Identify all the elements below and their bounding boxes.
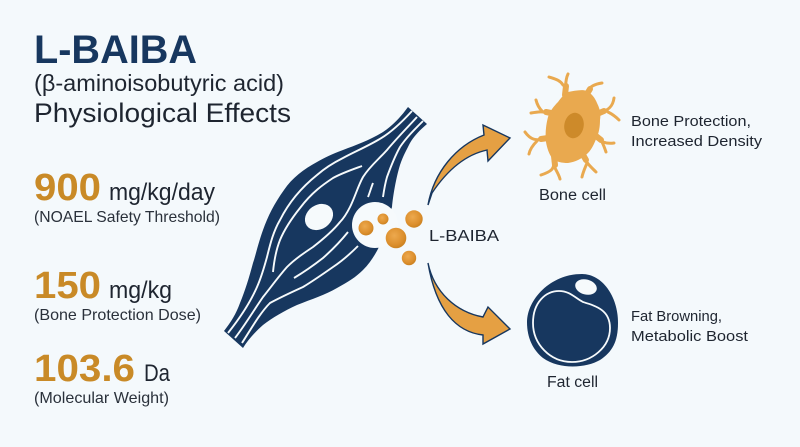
callout: bone effect: Increased Density bbox=[631, 133, 763, 150]
muscle nucleus bbox=[300, 199, 338, 235]
stat: molecular weight bbox=[34, 348, 171, 407]
cell processes bbox=[525, 74, 619, 179]
stat: NOAEL safety threshold: mg/kg/day bbox=[109, 179, 215, 206]
L-BAIBA molecules bbox=[358, 210, 423, 265]
cell body bbox=[546, 90, 600, 163]
heading block bbox=[34, 28, 291, 128]
cell nucleus bbox=[562, 111, 586, 140]
muscle fibres bbox=[228, 111, 423, 343]
stat: molecular weight: (Molecular Weight) bbox=[34, 390, 169, 407]
callout: bone effect bbox=[631, 113, 763, 150]
stat: molecular weight: Da bbox=[144, 360, 171, 387]
stat: molecular weight: 103.6 bbox=[34, 348, 135, 390]
icon: muscle bbox=[224, 107, 427, 348]
callout: fat effect bbox=[631, 308, 749, 345]
stat: bone protection dose: mg/kg bbox=[109, 277, 172, 304]
stat: NOAEL safety threshold: 900 bbox=[34, 167, 101, 209]
arrow: to fat cell bbox=[428, 263, 510, 344]
stat: NOAEL safety threshold bbox=[34, 167, 220, 226]
stat: bone protection dose: 150 bbox=[34, 265, 101, 307]
callout: fat effect: Fat Browning, bbox=[631, 308, 722, 325]
white notch around molecules bbox=[352, 202, 398, 248]
inner membrane bbox=[533, 291, 610, 362]
lipid droplet bbox=[573, 277, 599, 297]
label: fat cell: Fat cell bbox=[547, 374, 598, 391]
label: L-BAIBA: L-BAIBA bbox=[429, 228, 499, 245]
title: L-BAIBA bbox=[34, 28, 197, 72]
subtitle: physiological effects: Physiological Effects bbox=[34, 98, 291, 128]
stat: NOAEL safety threshold: (NOAEL Safety Threshold) bbox=[34, 209, 220, 226]
callout: bone effect: Bone Protection, bbox=[631, 113, 751, 130]
stat: bone protection dose bbox=[34, 265, 201, 324]
arrow: to bone cell bbox=[428, 125, 510, 205]
cell process bases bbox=[541, 86, 604, 165]
callout: fat effect: Metabolic Boost bbox=[631, 328, 749, 345]
stat: bone protection dose: (Bone Protection Dose) bbox=[34, 307, 201, 324]
subtitle: chemical name: (β-aminoisobutyric acid) bbox=[34, 70, 284, 96]
icon: fat cell bbox=[527, 274, 618, 366]
icon: bone cell bbox=[525, 74, 619, 179]
cell body bbox=[527, 274, 618, 366]
label: bone cell: Bone cell bbox=[539, 187, 606, 204]
